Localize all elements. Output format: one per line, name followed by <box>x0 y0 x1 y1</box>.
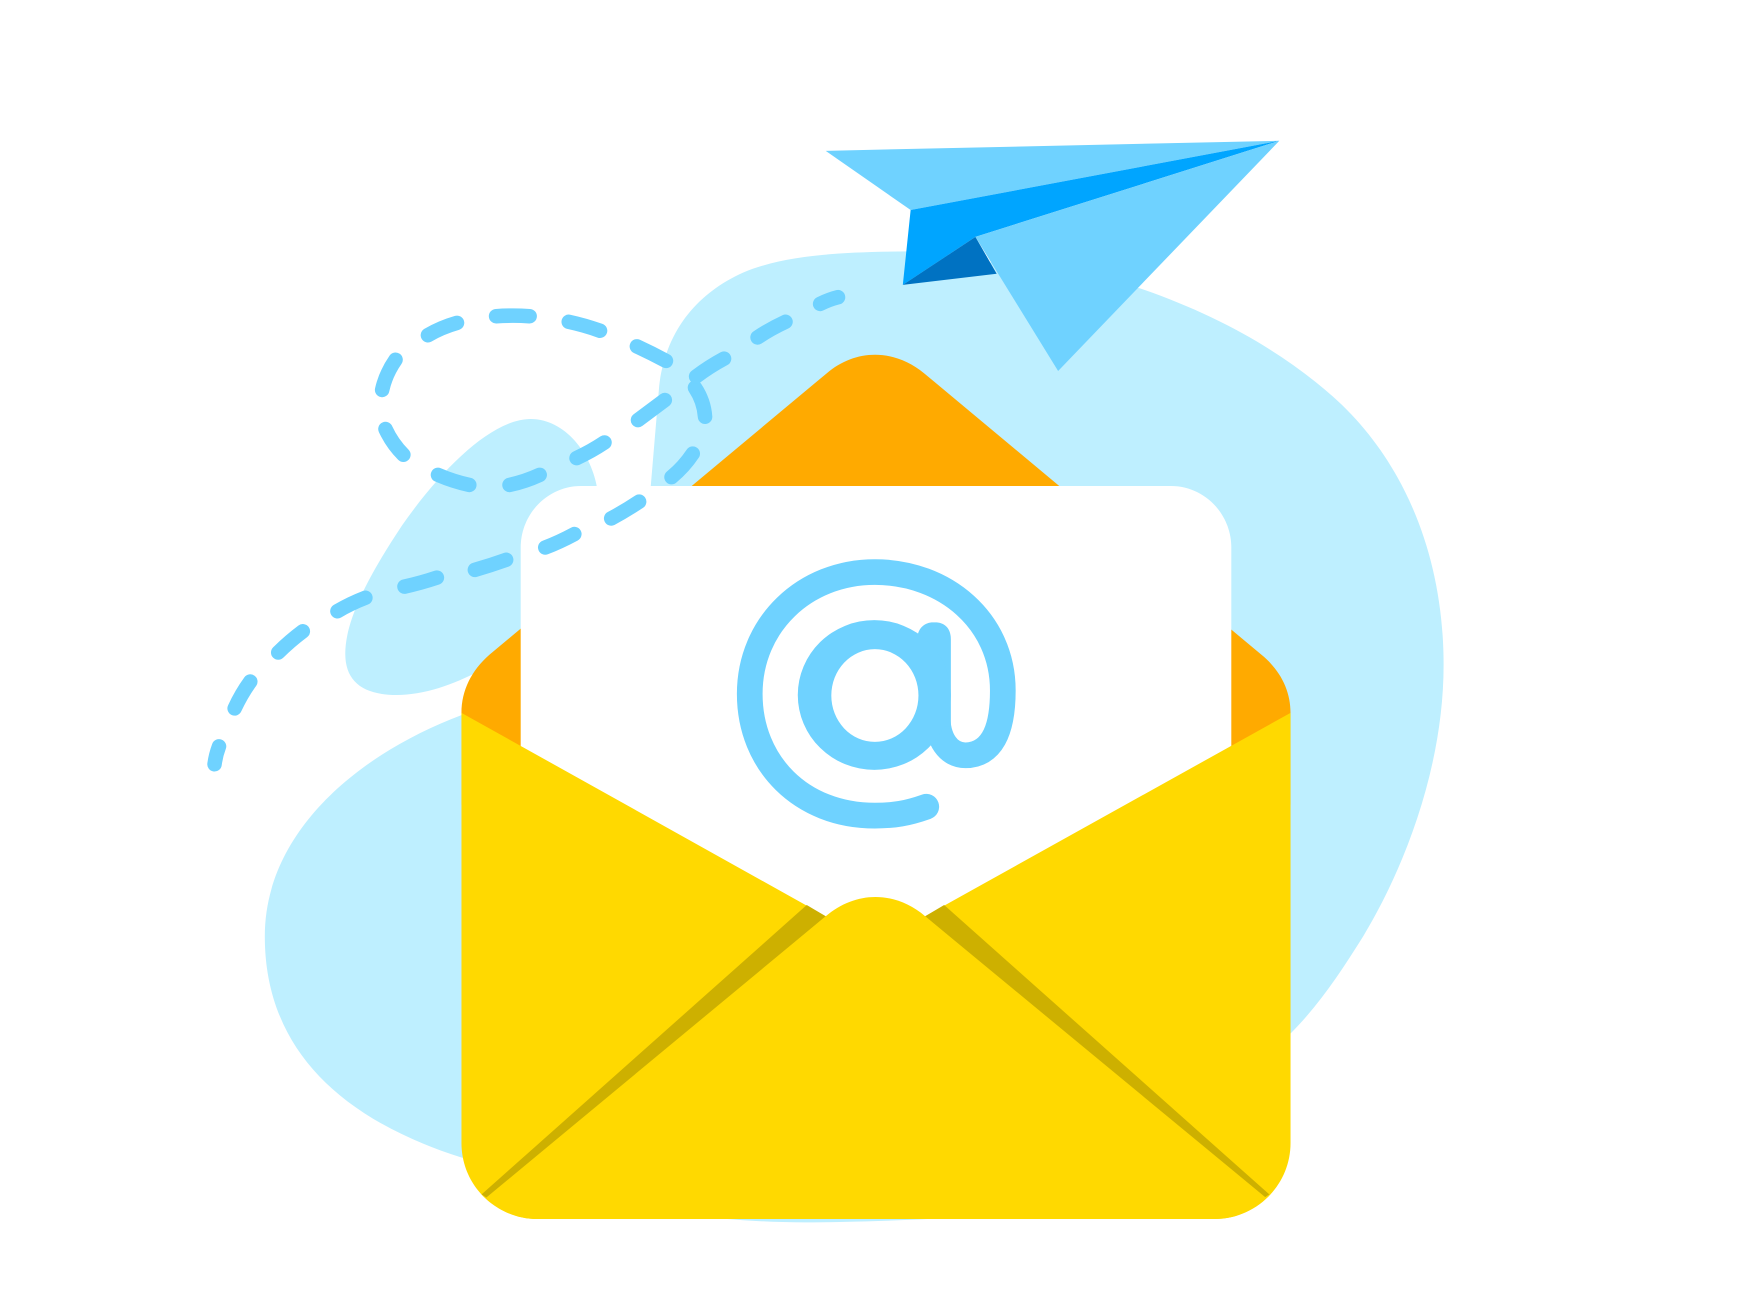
flap shadow left <box>482 905 826 1199</box>
plane lower wing <box>975 141 1279 371</box>
paper plane <box>826 141 1279 371</box>
background blob: large <box>265 251 1444 1222</box>
plane shadow fold <box>903 237 997 285</box>
plane centre fold <box>903 141 1279 285</box>
envelope front body <box>461 713 1291 1219</box>
envelope front flap <box>486 897 1266 1219</box>
letter card <box>521 486 1231 961</box>
envelope <box>461 355 1291 1219</box>
plane top wing <box>826 141 1279 210</box>
icon: at symbol <box>750 572 1003 816</box>
dashed flight path <box>215 297 838 764</box>
flap shadow right <box>925 905 1269 1199</box>
envelope back flap <box>461 355 1291 804</box>
background blob: small <box>345 419 598 695</box>
